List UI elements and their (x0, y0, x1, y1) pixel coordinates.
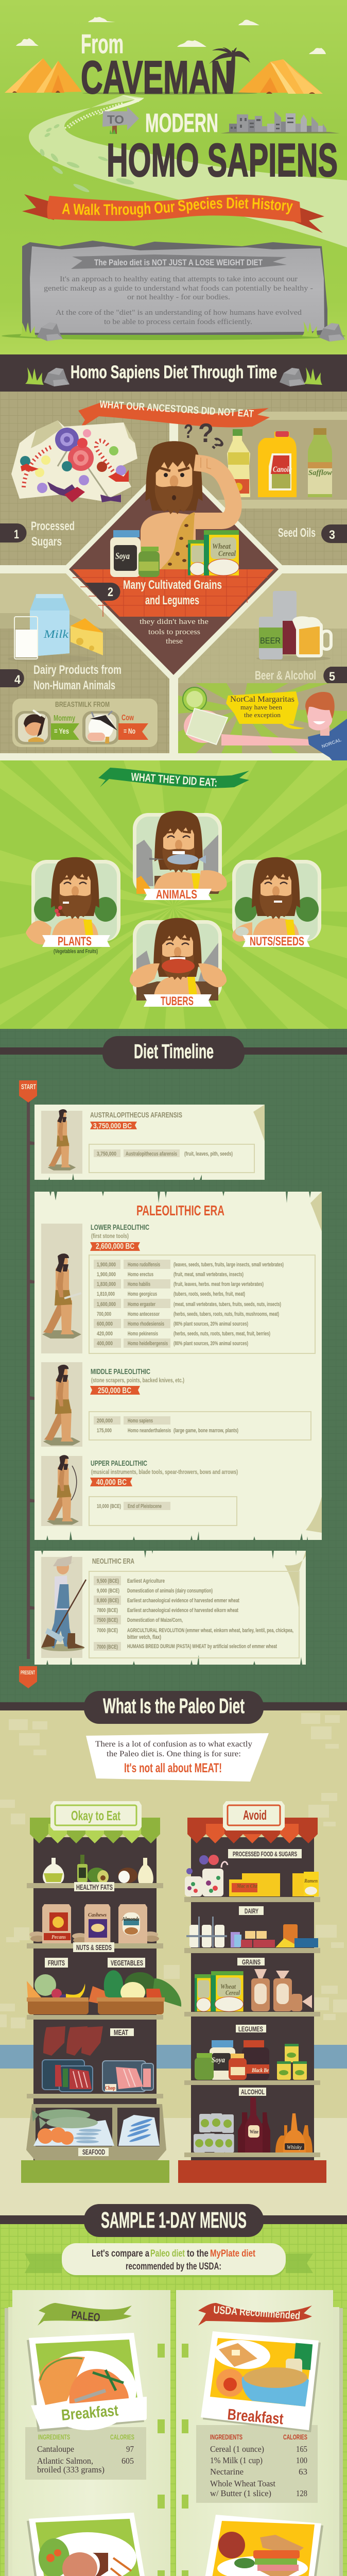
banner: what our ancestors did not eat (78, 399, 270, 429)
sign: Avoid (243, 1807, 267, 1823)
note in diamond: these (166, 637, 183, 646)
callout: compare diets: recommended by the USDA: (126, 2261, 221, 2272)
portrait of man in blue shirt: NORCAL (321, 737, 342, 749)
species table: (fruit, leaves, herbs. meat from large vertebrates) (173, 1281, 264, 1287)
flag: present (19, 1666, 37, 1688)
rocks and grass (20, 321, 345, 342)
polaroid: paleo breakfast (27, 2333, 147, 2432)
species table: 600,000 (97, 1321, 113, 1327)
species table (89, 1255, 315, 1353)
intro paragraph: genetic makeup as a guide to understand what foods can potentially be healthy - (44, 284, 313, 293)
hero background (0, 0, 347, 354)
middle paleolithic: 250,000 BC (98, 1386, 131, 1395)
label 4: dairy products: 4 (14, 673, 21, 687)
heading: what is the paleo diet: What Is the Paleo Diet (103, 1694, 245, 1718)
species table: Homo neanderthalensis (128, 1428, 171, 1434)
neolithic table: 8,800 (BCE) (97, 1598, 119, 1604)
shelf labels: HEALTHY FATS (76, 1883, 113, 1892)
era title: 3,750,000 BC (93, 1122, 132, 1130)
nuts and seeds: Cashews (88, 1912, 107, 1918)
mountains left (5, 58, 82, 93)
species table: (80% plant sources, 20% animal sources) (173, 1341, 248, 1347)
intro ribbon: The Paleo diet is NOT JUST A LOSE WEIGHT DIET (94, 258, 263, 267)
label 3: seed oils (278, 524, 347, 543)
ingredients: paleo breakfast: 605 (122, 2456, 134, 2466)
upper paleolithic: 40,000 BC (96, 1478, 127, 1487)
legumes: Black Be (251, 2066, 269, 2074)
heading: sample 1-day menus (0, 2204, 347, 2237)
intro paragraph: to be able to process certain foods efficiently. (104, 318, 252, 326)
sign: TO: TO (107, 113, 124, 126)
species table: 400,000 (97, 1341, 113, 1347)
neolithic table: 7500 (BCE) (97, 1617, 118, 1623)
speech bubble (226, 691, 305, 729)
species table: Homo rhodesiensis (128, 1321, 164, 1327)
label 5: beer and alcohol: 5 (329, 670, 335, 684)
shelf labels: NUTS & SEEDS (76, 1943, 112, 1952)
meat (42, 2026, 153, 2092)
store: avoid (178, 1801, 326, 2183)
mommy answer (51, 714, 79, 740)
panel: what they did eat (0, 760, 347, 1029)
illustration: milk and cheese (8, 594, 103, 663)
sunburst rays (0, 760, 347, 1029)
neolithic table: 7000 (BCE) (97, 1644, 118, 1650)
species table: (tubers, roots, seeds, herbs, fruit, meat) (173, 1291, 245, 1297)
legumes: Soya (212, 2056, 225, 2064)
meat: Chop (105, 2086, 115, 2091)
middle paleolithic (41, 1362, 311, 1447)
portrait: nuts and seeds (232, 857, 321, 942)
ingredients: usda breakfast: 100 (296, 2455, 307, 2465)
bottle labels: Canola (273, 465, 292, 474)
neolithic table: 9,500 (BCE) (97, 1578, 119, 1584)
heading: Diet Timeline (0, 1036, 347, 1069)
fruits and vegetables (27, 1970, 181, 2014)
illustration: soya and beans jars (110, 530, 160, 577)
callout: compare diets: Paleo diet (150, 2248, 185, 2259)
question marks: ? (184, 421, 193, 443)
upper paleolithic (41, 1455, 238, 1526)
species table: (fruit, meat, small vertebrates, insects) (173, 1272, 244, 1278)
portrait: plants (26, 857, 120, 944)
polaroid: paleo breakfast: Breakfast (61, 2402, 119, 2424)
speech bubble: the exception (244, 711, 281, 719)
mountains right (238, 59, 323, 94)
species table: 1,600,000 (97, 1301, 116, 1308)
era title: AUSTRALOPITHECUS AFARENSIS (90, 1111, 182, 1120)
card: neolithic era: NEOLITHIC ERA (92, 1557, 134, 1566)
ribbon: paleo: PALEO (71, 2308, 101, 2324)
callout: compare diets (25, 2243, 313, 2277)
label: plants: PLANTS (58, 935, 92, 948)
shelf labels: DAIRY (245, 1907, 258, 1915)
callout: not all about meat: It's not all about MEAT! (124, 1761, 222, 1775)
species table: (herbs, seeds, tubers, roots, nuts, fruits, mushrooms, meat) (173, 1311, 279, 1317)
timeline vine (27, 1101, 38, 1659)
illustration: beer cans and mug: BEER (260, 636, 281, 646)
diamond (62, 456, 286, 683)
nuts and seeds (29, 1904, 159, 1943)
label: animals: ANIMALS (156, 888, 197, 902)
label: nuts and seeds (242, 935, 310, 948)
alcohol (194, 2097, 313, 2153)
processed foods: Mac n Chz (236, 1883, 258, 1889)
species table: (meat, small vertebrates, tubers, fruits, seeds, nuts, insects) (173, 1301, 281, 1308)
middle paleolithic: (stone scrapers, points, backed knives, etc.) (91, 1377, 184, 1384)
shelf labels (45, 1882, 145, 2157)
ingredients: paleo breakfast: 97 (126, 2444, 134, 2454)
species table: Homo rudolfensis (128, 1262, 160, 1268)
lower paleolithic: (first stone tools) (91, 1232, 129, 1240)
species table: (herbs, seeds, nuts, roots, tubers, meat, fruit, berries) (173, 1331, 270, 1337)
awning (30, 1818, 160, 1843)
ribbon: paleo (38, 2303, 132, 2326)
title: MODERN: MODERN (145, 108, 218, 138)
shelf labels: ALCOHOL (241, 2088, 265, 2096)
portrait of man in blue shirt (305, 692, 347, 778)
ingredients: paleo breakfast: Atlantic Salmon, (37, 2456, 93, 2466)
callout: not all about meat: There is a lot of confusion as to what exactly (95, 1740, 252, 1749)
lower paleolithic: 2,600,000 BC (96, 1242, 134, 1251)
species table: 420,000 (97, 1331, 113, 1337)
polaroid: usda breakfast: Breakfast (227, 2406, 284, 2428)
callout: compare diets: to the (187, 2248, 209, 2259)
cow answer: = No (124, 727, 135, 736)
grains: Wheat (220, 1982, 236, 1990)
upper paleolithic: (musical instruments, blade tools, spear-throwers, bows and arrows) (91, 1468, 238, 1476)
illustration: oil bottles (227, 428, 332, 497)
cream dividers (0, 415, 347, 760)
awning (187, 1818, 318, 1843)
processed foods (185, 1855, 319, 1896)
flag: start (19, 1080, 37, 1103)
question marks: ? (198, 418, 214, 448)
ingredients: usda breakfast: w/ Butter (1 slice) (210, 2488, 271, 2498)
lower wall panels (0, 573, 347, 683)
question marks (184, 418, 228, 455)
shelf labels: FRUITS (48, 1959, 65, 1968)
seafood crate (26, 2104, 166, 2160)
processed foods: Ramen (304, 1878, 318, 1884)
species table (89, 1412, 311, 1440)
title: From: From (81, 29, 124, 59)
intro ribbon (71, 255, 287, 269)
shelf labels: GRAINS (242, 1958, 261, 1966)
card: paleolithic era (34, 1192, 322, 1540)
middle paleolithic: MIDDLE PALEOLITHIC (91, 1367, 150, 1376)
title: CAVEMAN: CAVEMAN (81, 52, 233, 104)
portrait: animals (133, 811, 227, 894)
end of pleistocene: End of Pleistocene (128, 1503, 162, 1510)
sign: TO (102, 107, 139, 134)
neolithic table: Domestication of Maize/Corn, (127, 1617, 183, 1623)
banner: what they did eat (98, 768, 249, 789)
label 4: dairy products (0, 663, 122, 692)
neolithic table: Earliest Agriculture (127, 1578, 165, 1584)
sign (50, 1801, 142, 1831)
panel: sample menus background (0, 2224, 347, 2576)
city skyline (220, 111, 340, 133)
upper paleolithic: UPPER PALEOLITHIC (91, 1459, 147, 1468)
panel: breastmilk: BREASTMILK FROM (55, 700, 110, 709)
sign (223, 1801, 285, 1831)
polaroid: usda lunch (201, 2515, 323, 2576)
flag: start: START (21, 1082, 36, 1091)
legumes (195, 2040, 307, 2080)
intro paragraph: At the core of the "diet" is an understanding of how humans have evolved (56, 309, 302, 317)
ingredients: paleo breakfast: broiled (333 grams) (37, 2465, 105, 2475)
data box: (fruit, leaves, pith, seeds) (184, 1151, 233, 1157)
panel: NorCal margaritas (178, 683, 347, 778)
lower paleolithic (41, 1223, 315, 1353)
note in diamond (140, 618, 209, 646)
era title (90, 1111, 182, 1130)
heading: what is the paleo diet (0, 1691, 347, 1724)
shelves (27, 1883, 163, 2098)
intro paragraph (44, 275, 313, 326)
ingredients: usda breakfast: 63 (299, 2467, 307, 2477)
species table: 200,000 (97, 1418, 113, 1424)
neolithic table: HUMANS BREED DURUM (PASTA) WHEAT by artificial selection of emmer wheat (127, 1643, 277, 1650)
bottle labels (273, 465, 333, 477)
species table: Homo habilis (128, 1281, 150, 1287)
species table: Homo sapiens (128, 1418, 153, 1424)
shelf labels: SEAFOOD (82, 2148, 105, 2157)
label 2: grains and legumes: 2 (108, 585, 113, 599)
mommy answer: = Yes (54, 727, 69, 736)
species table: Homo ergaster (128, 1301, 155, 1308)
ground shadow under title (82, 92, 257, 95)
shelf labels: MEAT (114, 2028, 128, 2037)
intro paragraph: It's an approach to healthy eating that attempts to take into account our (60, 275, 298, 283)
cow answer (118, 714, 148, 740)
label 1: processed sugars: Processed (31, 519, 75, 533)
species table: 1,810,000 (97, 1291, 115, 1297)
banner: subtitle: A Walk Through Our Species Diet History (62, 197, 293, 217)
clouds (16, 17, 326, 54)
palm tree (209, 47, 250, 94)
flag: present: PRESENT (21, 1670, 35, 1676)
intro paragraph: or not healthy - for our bodies. (127, 293, 230, 301)
illustration: milk and cheese: Milk (43, 628, 69, 640)
ingredients: usda breakfast: 1% Milk (1 cup) (210, 2455, 263, 2465)
ribbon: usda recommended: USDA Recommended (213, 2304, 301, 2322)
illustration: puzzled caveman (141, 441, 234, 569)
label 1: processed sugars: 1 (14, 528, 19, 541)
neolithic table: 7800 (BCE) (97, 1607, 118, 1614)
note in diamond: they didn't have the (140, 618, 209, 626)
label 1: processed sugars: Sugars (31, 535, 62, 549)
mommy answer: Mommy (54, 714, 75, 723)
nuts and seeds: Almonds (122, 1916, 140, 1922)
banner: what they did eat: WHAT THEY DID EAT: (131, 770, 218, 789)
shelf labels (228, 1849, 302, 2096)
label: tubers: TUBERS (161, 994, 194, 1008)
label 3: seed oils: 3 (329, 528, 335, 542)
label 3: seed oils: Seed Oils (278, 526, 316, 540)
ingredients: paleo breakfast: Cantaloupe (37, 2444, 74, 2454)
species table: (leaves, seeds, tubers, fruits, large insects, small vertebrates) (173, 1262, 284, 1268)
ingredients: usda breakfast: INGREDIENTS (210, 2433, 242, 2441)
neolithic table: 7000 (BCE) (97, 1628, 118, 1634)
polaroid: usda breakfast (201, 2331, 321, 2432)
neolithic table (89, 1571, 299, 1658)
ingredients: paleo breakfast: CALORIES (110, 2433, 134, 2441)
speech bubble: may have been (240, 703, 283, 711)
card: australopithecus (34, 1105, 265, 1180)
illustration: beer cans and mug (256, 591, 331, 661)
era title: PALEOLITHIC ERA (136, 1202, 224, 1218)
data box: 3,750,000 (97, 1151, 116, 1157)
illustration: cereal boxes: Wheat (212, 543, 231, 551)
species table: Homo antecessor (128, 1311, 160, 1317)
label 4: dairy products: Non-Human Animals (33, 679, 115, 692)
illustration: soya and beans jars: Soya (115, 551, 130, 561)
shelf labels: VEGETABLES (111, 1959, 143, 1968)
mommy portrait (15, 709, 51, 744)
species table: 700,000 (97, 1311, 111, 1317)
panel: diet timeline background (0, 1029, 347, 1704)
banner: what our ancestors did not eat: WHAT OUR ANCESTORS DID NOT EAT (99, 399, 254, 420)
ingredients: usda breakfast: Nectarine (210, 2467, 244, 2477)
label: plants (42, 935, 110, 955)
panel: what is the paleo diet wall (0, 1702, 347, 2215)
ribbon: usda recommended (198, 2303, 312, 2326)
species table: Homo erectus (128, 1272, 153, 1278)
shelf labels: LEGUMES (238, 2025, 263, 2033)
species table: 1,830,000 (97, 1281, 116, 1287)
cow portrait (82, 711, 119, 744)
ingredients: usda breakfast (196, 2425, 318, 2503)
lower paleolithic: LOWER PALEOLITHIC (91, 1223, 149, 1232)
label: nuts and seeds: NUTS/SEEDS (250, 935, 304, 948)
question marks: ? (206, 433, 228, 455)
heading: Diet Timeline: Diet Timeline (134, 1041, 214, 1063)
neolithic table: Earliest archaeological evidence of harvested eikorn wheat (127, 1607, 238, 1614)
ingredients: usda breakfast: 165 (296, 2444, 307, 2454)
footprints on road (39, 123, 135, 194)
oils alcove (178, 412, 347, 509)
species table: Homo georgicus (128, 1291, 157, 1297)
panel: what ancestors did not eat (0, 392, 347, 778)
shelves (184, 1897, 320, 2157)
alcohol: Wine (250, 2129, 258, 2135)
dairy (186, 1917, 318, 1947)
callout: not all about meat (86, 1733, 269, 1782)
label 1: processed sugars (0, 519, 75, 549)
healthy fats (43, 1855, 153, 1884)
ingredients: usda breakfast: 128 (296, 2488, 307, 2498)
label: plants: (Vegetables and Fruits) (54, 948, 98, 955)
ingredients: usda breakfast: CALORIES (283, 2433, 307, 2441)
neolithic table: 9,000 (BCE) (97, 1588, 119, 1594)
grains (195, 1969, 312, 2011)
cow answer: Cow (122, 714, 134, 722)
neolithic table: bitter vetch, flax) (127, 1634, 161, 1640)
store: okay to eat (21, 1801, 181, 2183)
bottle labels: Safflow (308, 469, 333, 477)
speech bubble: NorCal Margaritas (230, 695, 294, 704)
label 4: dairy products: Dairy Products from (33, 663, 122, 677)
data box (89, 1144, 254, 1173)
neolithic table: Domestication of animals (dairy consumption) (127, 1588, 213, 1594)
data box: Australopithecus afarensis (126, 1151, 177, 1157)
illustration: cereal boxes (188, 530, 239, 575)
callout: compare diets: Let's compare a (92, 2248, 149, 2259)
heading: Homo Sapiens Diet Through Time (0, 354, 347, 392)
label 5: beer and alcohol: Beer & Alcohol (255, 669, 316, 683)
farmer (41, 1556, 86, 1651)
illustration: cereal boxes: Cereal (218, 550, 236, 558)
ingredients: usda breakfast: Whole Wheat Toast (210, 2479, 275, 2488)
species table: Homo heidelbergensis (128, 1341, 168, 1347)
note in diamond: tools to process (148, 628, 200, 636)
polaroid: paleo lunch (27, 2513, 149, 2576)
neolithic table: Earliest archaeological evidence of harvested emmer wheat (127, 1598, 239, 1604)
species table: 175,000 (97, 1428, 112, 1434)
illustration: candies on paper (11, 420, 137, 502)
end of pleistocene: 10,000 (BCE) (97, 1503, 121, 1510)
hand with margarita (183, 687, 310, 745)
banner: subtitle (22, 194, 324, 233)
species table: 1,900,000 (97, 1272, 116, 1278)
menu book pages (5, 2290, 343, 2576)
portrait: tubers (130, 918, 227, 1001)
ingredients: paleo breakfast: INGREDIENTS (38, 2433, 70, 2441)
alcohol: Whisky (287, 2145, 302, 2150)
label 2: grains and legumes (85, 578, 222, 607)
ingredients: usda breakfast: Cereal (1 ounce) (210, 2444, 264, 2454)
species table: Homo pekinensis (128, 1331, 158, 1337)
label 2: grains and legumes: Many Cultivated Grains (123, 578, 222, 592)
panel: stone tablet intro (2, 241, 345, 342)
panel: breastmilk (12, 699, 158, 747)
species table: (large game, bone marrow, plants) (173, 1428, 238, 1434)
sign: Okay to Eat (71, 1808, 120, 1823)
shelf labels: PROCESSED FOOD & SUGARS (233, 1850, 297, 1858)
end of pleistocene (89, 1497, 237, 1526)
callout: not all about meat: the Paleo diet is. One thing is for sure: (107, 1750, 241, 1758)
species table: 1,900,000 (97, 1262, 116, 1268)
callout: compare diets: MyPlate diet (210, 2248, 256, 2259)
species table: (80% plant sources, 20% animal sources) (173, 1321, 248, 1327)
nuts and seeds: Pecans (51, 1934, 66, 1940)
label 2: grains and legumes: and Legumes (145, 594, 199, 607)
ingredients: paleo breakfast (25, 2427, 146, 2480)
card: neolithic era (34, 1551, 306, 1665)
grains: Cereal (225, 1989, 240, 1996)
